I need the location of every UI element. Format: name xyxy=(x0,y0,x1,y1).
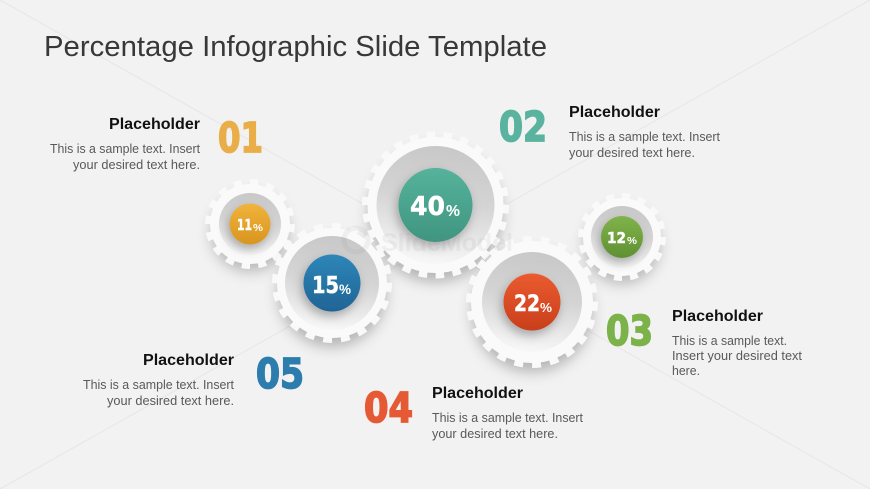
item 03: Placeholder xyxy=(672,308,763,325)
gear: 40% teal: % xyxy=(446,203,460,220)
item 05 xyxy=(83,350,304,408)
gear: 22% red: 22 xyxy=(514,292,540,317)
item 03: This is a sample text. xyxy=(672,334,787,348)
watermark: SlideModel xyxy=(381,229,513,257)
item 03 xyxy=(606,307,803,378)
gear: 15% blue: 15 xyxy=(312,273,339,299)
gear: 11% yellow: 11 xyxy=(237,216,252,234)
item 04: Placeholder xyxy=(432,385,523,402)
item 05: your desired text here. xyxy=(107,394,234,408)
title: Percentage Infographic Slide Template xyxy=(44,31,547,63)
gear: 12% green: % xyxy=(627,236,637,247)
gear: 11% yellow: % xyxy=(253,223,263,234)
item 04: This is a sample text. Insert xyxy=(432,411,584,425)
item 05: 05 xyxy=(256,350,304,398)
item 02: 02 xyxy=(499,103,547,151)
gear: 15% blue xyxy=(276,226,388,347)
gear: 40% teal: 40 xyxy=(410,192,445,222)
gear: 12% green xyxy=(582,196,662,284)
item 02: Placeholder xyxy=(569,104,660,121)
item 04 xyxy=(364,384,584,441)
item 03: Insert your desired text xyxy=(672,349,803,363)
item 05: This is a sample text. Insert xyxy=(83,378,235,392)
gear: 22% red xyxy=(470,240,594,372)
gear: 12% green: 12 xyxy=(607,229,626,247)
gear: 40% teal xyxy=(366,135,506,282)
item 04: your desired text here. xyxy=(432,427,558,441)
gear: 15% blue: % xyxy=(339,281,352,297)
item 02: your desired text here. xyxy=(569,146,695,160)
item 01 xyxy=(50,114,263,172)
item 03: 03 xyxy=(606,307,653,355)
item 01: 01 xyxy=(218,114,263,162)
gear: 22% red: % xyxy=(540,300,552,315)
gear: 11% yellow xyxy=(208,182,292,272)
item 01: your desired text here. xyxy=(73,158,200,172)
item 02 xyxy=(499,103,721,160)
item 01: This is a sample text. Insert xyxy=(50,142,201,156)
item 05: Placeholder xyxy=(143,352,234,369)
item 01: Placeholder xyxy=(109,116,200,133)
item 03: here. xyxy=(672,364,700,378)
item 02: This is a sample text. Insert xyxy=(569,130,721,144)
item 04: 04 xyxy=(364,384,413,432)
